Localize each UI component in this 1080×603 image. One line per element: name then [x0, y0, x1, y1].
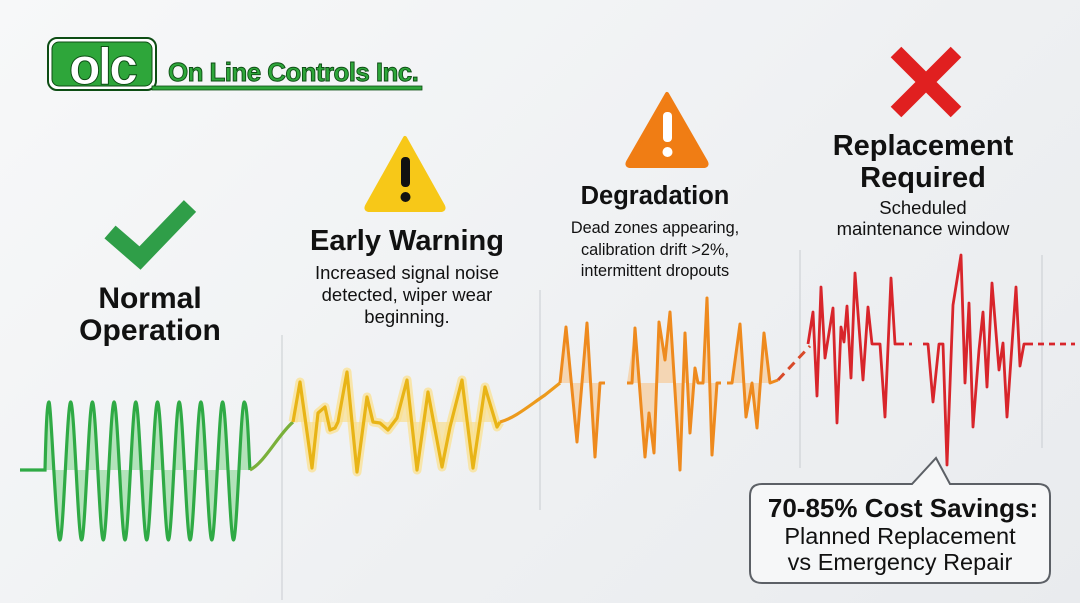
heading: degradation: Degradation — [581, 182, 729, 210]
text: early warning detail: detected, wiper wear — [322, 284, 492, 305]
text: degradation detail — [571, 219, 739, 280]
chart: replacement red wave — [808, 255, 1075, 465]
text: early warning detail: Increased signal noise — [315, 262, 499, 283]
icon: yellow warning — [366, 138, 444, 210]
text: early warning detail: beginning. — [364, 306, 450, 327]
logo: On Line Controls Inc. — [168, 57, 418, 87]
dividers — [282, 250, 1042, 600]
heading: normal operation: Operation — [79, 314, 221, 347]
heading: replacement required: Required — [860, 162, 986, 194]
logo — [48, 38, 422, 96]
callout box: vs Emergency Repair — [788, 549, 1012, 575]
text: degradation detail: Dead zones appearing, — [571, 219, 739, 237]
icon: check mark — [110, 206, 190, 258]
icon: red X — [896, 52, 956, 112]
logo: olc — [69, 38, 137, 96]
chart: early warning yellow wave — [293, 372, 560, 472]
text: degradation detail: intermittent dropouts — [581, 262, 729, 280]
heading: normal operation — [79, 282, 221, 347]
text: replacement detail — [837, 197, 1010, 239]
icon: orange warning — [627, 94, 707, 166]
heading: replacement required — [833, 130, 1013, 194]
text: degradation detail: calibration drift >2%, — [581, 240, 729, 258]
text: replacement detail: Scheduled — [879, 197, 967, 218]
callout box — [750, 458, 1050, 583]
callout box: 70-85% Cost Savings: — [768, 493, 1038, 523]
heading: replacement required: Replacement — [833, 130, 1013, 162]
chart: degradation orange wave — [560, 298, 810, 470]
text: replacement detail: maintenance window — [837, 218, 1009, 239]
callout box: Planned Replacement — [784, 523, 1016, 549]
text: early warning detail — [315, 262, 499, 327]
chart: normal green wave — [20, 402, 293, 540]
heading: normal operation: Normal — [98, 282, 202, 315]
heading: early warning: Early Warning — [310, 225, 504, 257]
